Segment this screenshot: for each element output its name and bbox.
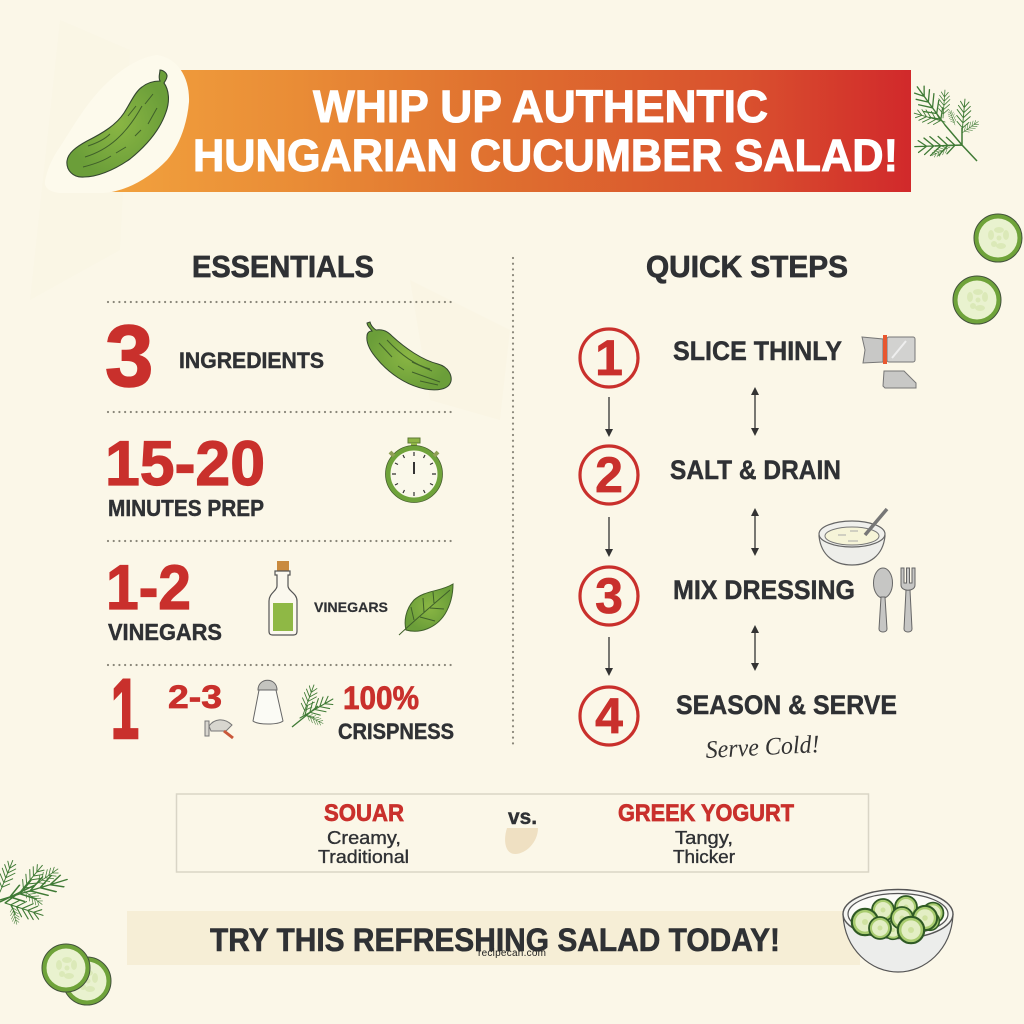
stat: 1: 1 <box>111 662 139 756</box>
greek yogurt: GREEK YOGURT <box>618 800 794 827</box>
cream badge behind cucumber <box>45 55 189 193</box>
step labels: SLICE THINLY <box>673 336 842 366</box>
souar: Creamy, <box>327 828 401 848</box>
icon: dill top right <box>910 81 981 161</box>
step numbers: 2 <box>595 447 623 503</box>
icon: banner cucumber <box>67 70 168 177</box>
stat: 15-20 minutes prep: 15-20 <box>105 429 265 499</box>
stat: 3 ingredients: INGREDIENTS <box>179 348 324 373</box>
stat: 100% crispness <box>338 680 454 744</box>
panel: comparison <box>176 794 868 872</box>
stat: 3 ingredients <box>105 308 324 405</box>
icon: cucumber slices top right <box>953 214 1022 324</box>
stat: 15-20 minutes prep: MINUTES PREP <box>108 495 264 521</box>
vs <box>505 806 538 854</box>
icon: salad bowl <box>843 890 953 972</box>
stat: 1-2 vinegars: 1-2 <box>106 553 191 623</box>
step numbers <box>595 330 623 744</box>
step labels: SALT & DRAIN <box>670 455 841 485</box>
stat: 3 ingredients: 3 <box>105 308 153 405</box>
icon: salt shaker <box>253 680 283 724</box>
greek yogurt <box>618 800 794 867</box>
heading: quick steps: QUICK STEPS <box>646 249 848 284</box>
icon: stopwatch <box>386 438 442 502</box>
watermark: recipecan.com <box>478 948 546 959</box>
step labels: MIX DRESSING <box>673 575 855 605</box>
vs: vs. <box>508 806 537 829</box>
stat: 1-2 vinegars <box>106 553 222 645</box>
icon: vinegar bottle <box>269 561 297 635</box>
label: vinegars small: VINEGARS <box>314 599 388 615</box>
icon: dressing bowl <box>819 509 887 565</box>
icon: dill sprig <box>292 683 337 727</box>
icon: dill bottom left <box>0 858 70 925</box>
panel: essentials <box>105 308 454 756</box>
souar: Traditional <box>318 847 409 867</box>
heading: essentials: ESSENTIALS <box>192 249 374 284</box>
title text: WHIP UP AUTHENTIC <box>313 81 768 132</box>
title text <box>193 81 898 181</box>
greek yogurt: Tangy, <box>675 828 733 848</box>
script note: Serve Cold! <box>705 731 820 764</box>
title text: HUNGARIAN CUCUMBER SALAD! <box>193 130 898 181</box>
greek yogurt: Thicker <box>673 847 735 867</box>
arrows <box>605 387 759 676</box>
stat: 100% crispness: CRISPNESS <box>338 719 454 744</box>
icon: cucumber <box>367 322 451 390</box>
icon: cucumber slices bottom left <box>42 944 111 1005</box>
icon: knife <box>862 335 916 388</box>
title banner <box>45 55 911 193</box>
step circles <box>580 329 638 745</box>
call to action: TRY THIS REFRESHING SALAD TODAY! <box>210 922 780 958</box>
icon: spoon and fork <box>874 568 915 632</box>
step labels <box>670 336 897 720</box>
souar: SOUAR <box>324 800 404 827</box>
icon: leaf <box>399 584 453 635</box>
souar <box>318 800 409 867</box>
step numbers: 4 <box>595 688 623 744</box>
icon: salt scoop <box>205 720 233 738</box>
step labels: SEASON & SERVE <box>676 690 897 720</box>
call to action <box>127 911 860 965</box>
stat: 100% crispness: 100% <box>343 680 419 716</box>
step numbers: 1 <box>595 330 623 386</box>
stat: 1-2 vinegars: VINEGARS <box>108 619 222 645</box>
panel: quick steps <box>580 329 916 764</box>
step numbers: 3 <box>595 568 623 624</box>
dividers <box>108 258 513 746</box>
stat: 2-3: 2-3 <box>168 679 222 715</box>
